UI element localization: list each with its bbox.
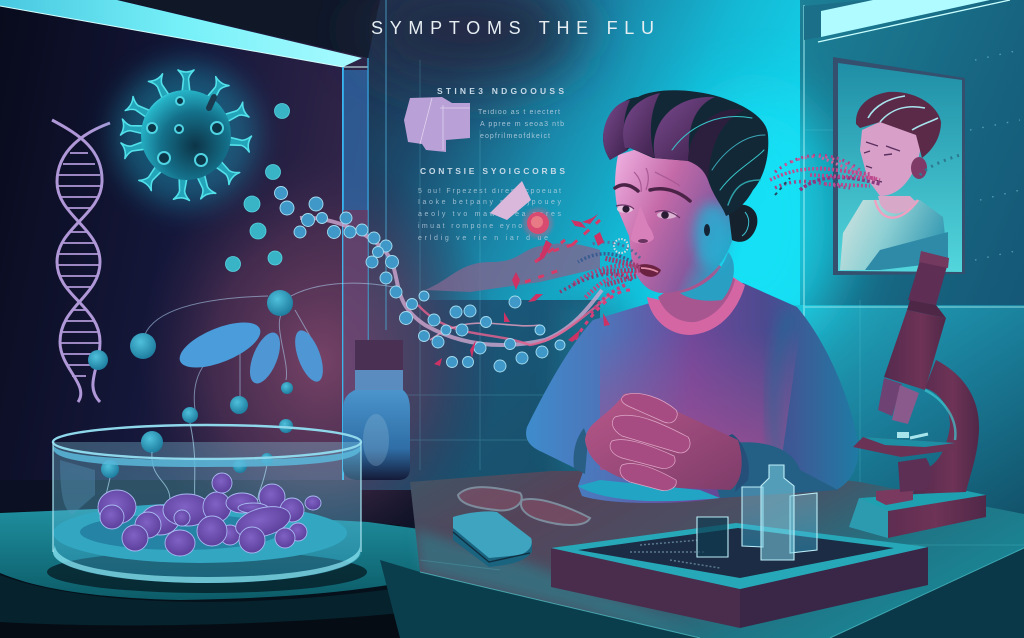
- chain beads: [274, 186, 565, 372]
- chart: terrain silhouette: [425, 243, 600, 292]
- bottle cap: [355, 340, 403, 376]
- tray right face: [740, 547, 928, 628]
- reflection: collar: [875, 200, 918, 218]
- dish glass wall: [53, 442, 361, 583]
- reflection: features: [864, 142, 900, 182]
- bacteria network threads: [143, 283, 398, 410]
- body text: second section: [418, 188, 562, 242]
- body text: second section: aeoly tvo mawe nea pares: [418, 211, 562, 218]
- chain ribbons: [300, 218, 602, 345]
- right cuff: [724, 434, 749, 492]
- hair lobes: [603, 100, 630, 160]
- reflection: face: [860, 115, 925, 196]
- glowing ceiling light, left panel: [0, 0, 386, 480]
- helix strands: [52, 120, 102, 402]
- lower focus knob: [898, 458, 931, 492]
- microscope: [849, 251, 986, 538]
- desk: [380, 470, 1024, 638]
- right forearm: [705, 442, 838, 498]
- dish liquid: [53, 503, 347, 563]
- DNA helix: [52, 120, 110, 402]
- title: SYMPTOMS THE FLU: [371, 18, 654, 38]
- virus body: [141, 90, 231, 180]
- heading: first section: STINE3 NDGOOUSS: [437, 86, 564, 96]
- reflection: ear: [911, 157, 927, 179]
- hair: [603, 90, 768, 216]
- icon: pink virus cell: [523, 208, 553, 238]
- teal jaw highlight: [694, 203, 730, 267]
- desk top surface: [410, 470, 1024, 638]
- faint wall grid: [368, 60, 1024, 500]
- bottle: [343, 340, 410, 480]
- chest shading: [600, 330, 800, 470]
- desk front teal band: [380, 560, 700, 638]
- bottle body: [343, 390, 410, 480]
- neck: [658, 258, 735, 322]
- body text: second section: Iaoke betpany rore jpouey: [418, 199, 562, 206]
- nose: [631, 205, 654, 244]
- heading: second section: CONTSIE SYOIGCORBS: [420, 166, 565, 176]
- tall bottle: [761, 465, 794, 560]
- person: [526, 90, 858, 503]
- floating spheres in dish: [101, 431, 273, 478]
- display tray: [551, 523, 928, 628]
- icon: pink slide fragment: [490, 181, 531, 220]
- bottle label band: [355, 370, 403, 390]
- reflection: body: [840, 200, 948, 270]
- body tube: [884, 310, 946, 390]
- stage: [853, 437, 955, 457]
- right beaker: [790, 493, 817, 553]
- body text: first section: [478, 109, 564, 140]
- small beaker: [697, 517, 728, 557]
- mirror with reflection: [833, 57, 965, 275]
- collar: [647, 277, 745, 335]
- left cuff: [573, 428, 588, 474]
- purple cell cluster: [98, 473, 321, 556]
- icon: virus: [114, 63, 258, 207]
- reflection: neck: [878, 196, 916, 214]
- sneeze particle cloud: [525, 220, 640, 340]
- sneeze stream to reflection: [770, 155, 960, 195]
- dish threads: [106, 423, 267, 520]
- torso and arms: [526, 283, 858, 503]
- glasses case: [453, 511, 532, 567]
- eyes: [616, 205, 680, 219]
- tray left face: [551, 548, 740, 628]
- petri dish: [47, 423, 367, 593]
- body text: second section: imuat rompone eyno 2tra: [418, 223, 548, 230]
- text panel: second section: [418, 166, 565, 242]
- left beaker: [742, 487, 763, 547]
- microscope base: [849, 498, 888, 538]
- bacterium: [244, 328, 286, 388]
- desk teal reflection: [415, 530, 700, 638]
- mouth: [636, 264, 661, 277]
- eyebrows: [615, 185, 690, 201]
- dish rim: [53, 425, 361, 459]
- pedestal: [876, 488, 913, 505]
- bead chain spreading from virus to person: [274, 186, 610, 372]
- bacteria and connector nodes: [88, 290, 329, 433]
- body text: second section: erldig ve rie n iar d ue: [418, 235, 548, 242]
- brow creases: [634, 168, 680, 192]
- body text: first section: eopfrilmeofdkeict: [480, 133, 550, 140]
- left shelf: [0, 508, 520, 638]
- virus spikes: [121, 70, 251, 200]
- eyeglasses: [458, 487, 590, 525]
- mirror frame: [833, 57, 965, 275]
- shirt hem: [578, 480, 720, 501]
- floating cell particles: [226, 104, 290, 272]
- text panel: first section: [437, 86, 564, 140]
- red droplets: [434, 214, 610, 366]
- reflection: hair: [856, 92, 941, 158]
- ceiling light, right panel: [804, 0, 1024, 500]
- icon: lavender folded panel: [404, 97, 470, 152]
- face: [615, 145, 736, 293]
- clasped hands: [585, 393, 742, 490]
- eyepiece: [908, 257, 948, 305]
- tray rim: [551, 523, 928, 589]
- connector nodes: [88, 290, 293, 433]
- body text: second section: 5 ou! Frpezest diress cpoeuat: [418, 188, 561, 195]
- mirror glass: [838, 63, 962, 272]
- hair highlights: [672, 117, 765, 205]
- virus surface receptors: [147, 97, 223, 166]
- dish shadow: [47, 551, 367, 593]
- large bacterium: [174, 313, 266, 377]
- body text: first section: A ppree m seoa3 ntb: [480, 121, 564, 128]
- arm: [913, 360, 979, 494]
- bacterium: [289, 327, 329, 385]
- fingers: [610, 393, 690, 491]
- objectives: [878, 378, 902, 416]
- glass beakers and bottle: [697, 465, 817, 560]
- helix rungs: [57, 153, 101, 376]
- tray inner glass: [578, 528, 894, 578]
- wall speckle: [970, 50, 1020, 260]
- ear: [728, 204, 757, 242]
- body text: first section: Teidioo as t eiectert: [478, 109, 560, 116]
